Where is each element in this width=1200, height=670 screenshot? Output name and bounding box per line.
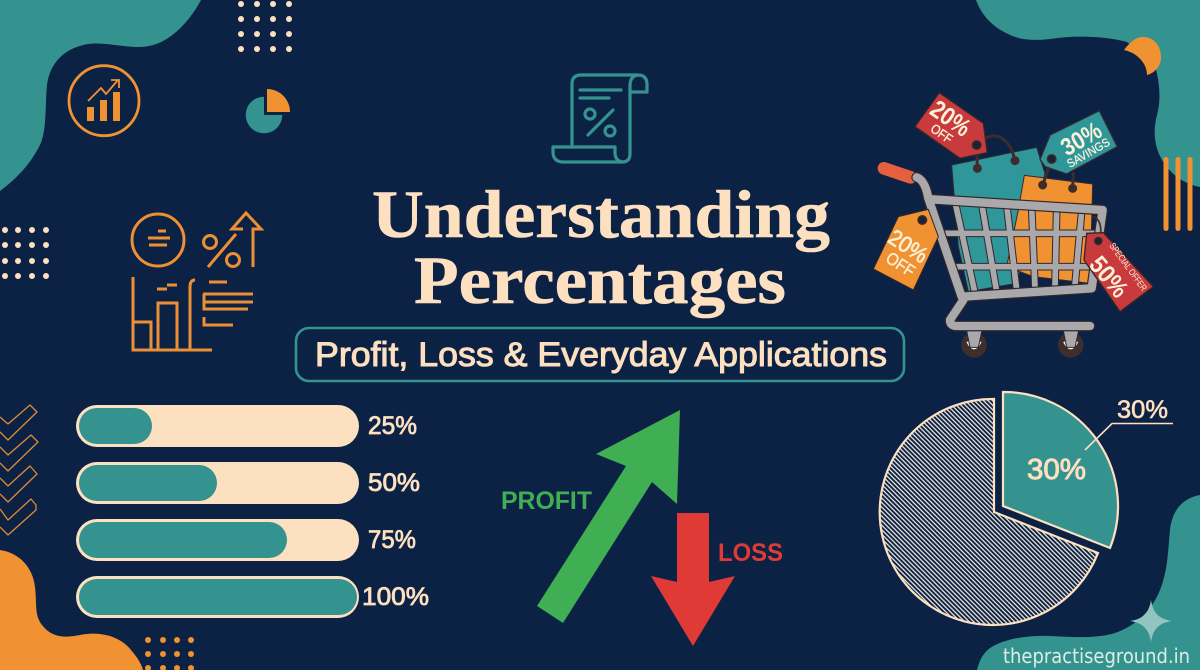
blob: bottom left orange bbox=[0, 550, 143, 670]
title: Percentages bbox=[414, 242, 786, 318]
shopping bag: teal bbox=[952, 147, 1045, 292]
pie: hatched 70% slice bbox=[880, 399, 1098, 625]
pie: leader line bbox=[1085, 424, 1173, 450]
cart wheels bbox=[961, 327, 1083, 358]
icon: growth chart in circle bbox=[69, 66, 139, 136]
cart handle grip bbox=[884, 168, 911, 177]
pie chart bbox=[880, 392, 1173, 625]
progress bar: 75%: 75% bbox=[368, 526, 416, 554]
icon: percent receipt scroll bbox=[553, 75, 647, 162]
tag: red special offer 50% bbox=[1083, 217, 1153, 312]
cart grid outline bbox=[940, 202, 1095, 293]
label: profit: PROFIT bbox=[501, 487, 592, 515]
icon: sparkle star bbox=[1130, 600, 1172, 642]
pie: inner label: 30% bbox=[1027, 454, 1086, 486]
cart frame steel bbox=[917, 177, 1103, 326]
title: Understanding bbox=[372, 176, 830, 252]
tag: orange 20% off bbox=[873, 209, 938, 290]
blob: bottom right teal bbox=[977, 495, 1200, 670]
dots: top cream grid bbox=[238, 1, 292, 52]
icon: analytics line art bbox=[132, 213, 261, 350]
subtitle pill: Profit, Loss & Everyday Applications bbox=[315, 336, 887, 374]
progress bar: 100% bbox=[76, 576, 429, 618]
tag: teal 30% savings: SAVINGS bbox=[1064, 135, 1112, 171]
tag: teal 30% savings: 30% bbox=[1056, 117, 1107, 162]
icon: orange crescent bbox=[1124, 37, 1161, 75]
pie: teal 30% slice bbox=[1003, 392, 1118, 548]
title bbox=[372, 176, 830, 318]
cart grid steel bbox=[940, 202, 1095, 293]
progress bar: 25%: 25% bbox=[368, 412, 417, 440]
arrow: loss down bbox=[651, 513, 735, 646]
tag: red special offer 50%: 50% bbox=[1083, 251, 1134, 303]
tag: teal 30% savings bbox=[1040, 111, 1117, 174]
pie: callout label: 30% bbox=[1117, 396, 1168, 424]
icon: outlined check marks bbox=[0, 405, 38, 535]
arrow: profit up bbox=[537, 410, 680, 623]
progress bar: 50% bbox=[76, 462, 420, 504]
label: loss: LOSS bbox=[718, 539, 783, 567]
tag: orange 20% off: 20% bbox=[884, 224, 933, 268]
tag: red 20% off: OFF bbox=[928, 121, 955, 146]
bag handles bbox=[974, 136, 1076, 191]
tag: red 20% off: 20% bbox=[925, 95, 976, 142]
tag: red special offer 50%: SPECIAL OFFER bbox=[1107, 241, 1149, 293]
shopping cart illustration bbox=[873, 93, 1153, 358]
subtitle pill bbox=[296, 328, 904, 381]
blob: top right teal bbox=[976, 0, 1200, 187]
shopping bag: orange bbox=[1007, 175, 1093, 283]
progress bar: 100%: 100% bbox=[362, 583, 429, 611]
progress bar: 25% bbox=[76, 405, 417, 447]
tag: red 20% off bbox=[915, 93, 987, 158]
cart frame outline bbox=[917, 177, 1103, 326]
progress bar: 75% bbox=[76, 519, 416, 561]
icon: small pie bbox=[246, 89, 290, 133]
decorative orange bars bbox=[1164, 157, 1192, 231]
blob: top left teal bbox=[0, 0, 201, 191]
dots: left cream grid bbox=[2, 227, 49, 279]
dots: bottom orange grid bbox=[145, 637, 194, 670]
tag: orange 20% off: OFF bbox=[882, 248, 919, 281]
progress bar: 50%: 50% bbox=[368, 469, 420, 497]
